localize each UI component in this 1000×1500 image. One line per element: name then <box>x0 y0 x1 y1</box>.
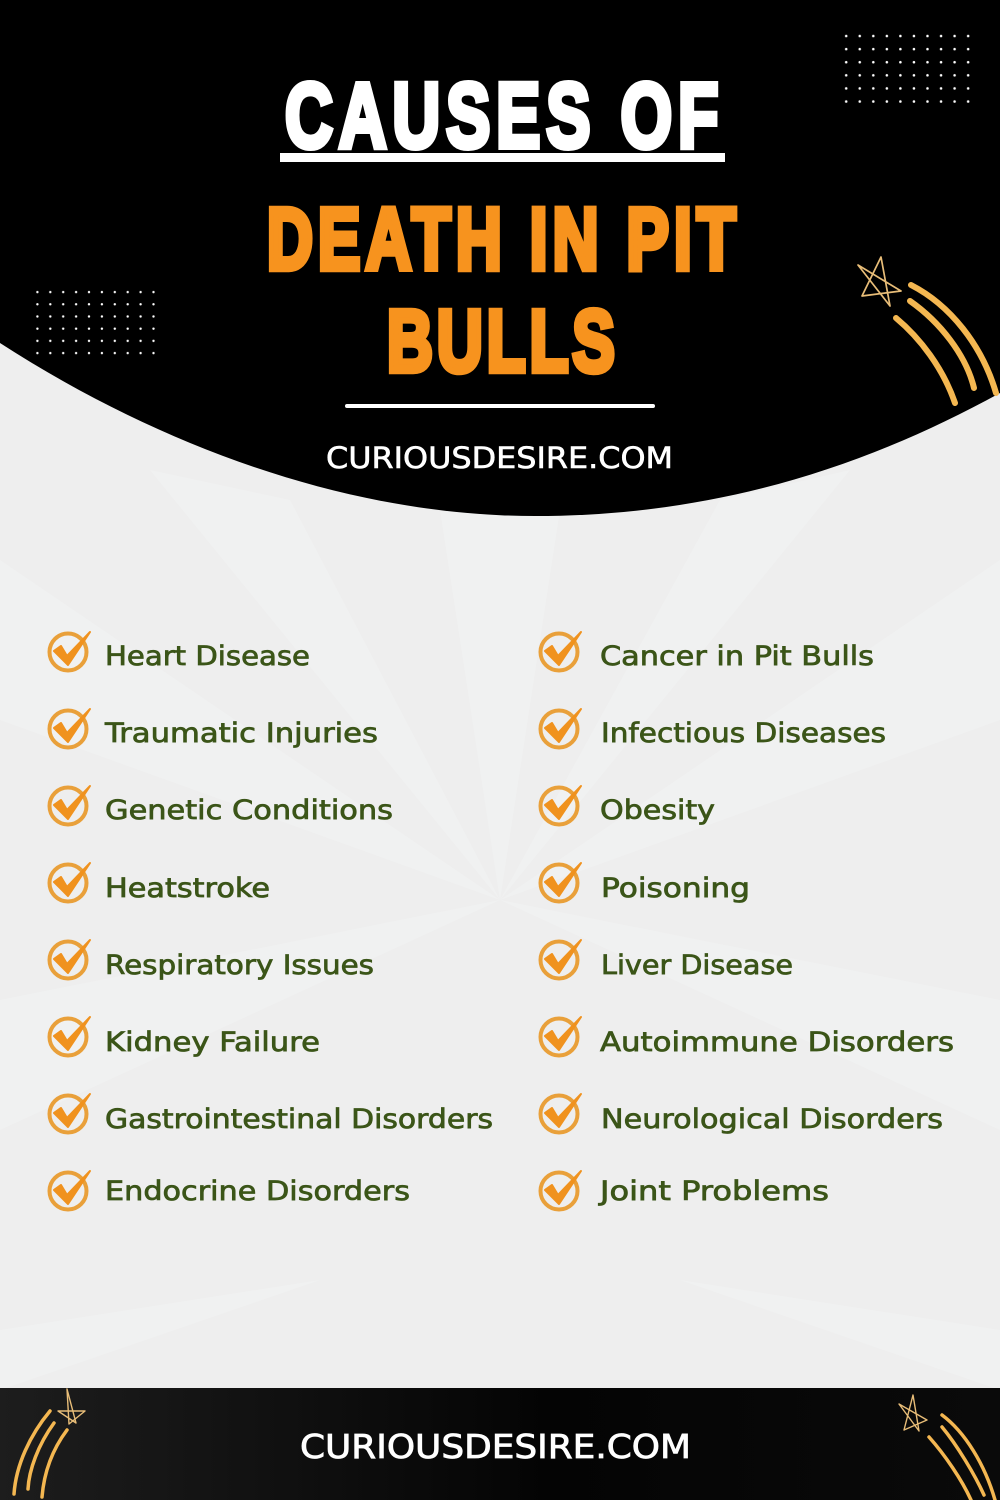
item: joint problems: Joint Problems <box>598 1176 829 1207</box>
icon: shooting star top right <box>858 257 996 403</box>
icon: shooting star footer right <box>899 1395 995 1500</box>
title line: bulls: BULLS <box>387 293 615 390</box>
title line: causes of: CAUSES OF <box>285 63 718 167</box>
item: liver disease <box>540 940 793 981</box>
item: kidney failure <box>50 1017 320 1058</box>
item: gastrointestinal disorders <box>50 1094 493 1135</box>
item: neurological disorders <box>540 1094 943 1135</box>
item: heart disease <box>50 632 310 672</box>
header website text: CURIOUSDESIRE.COM <box>326 441 673 475</box>
title line: death in pit: DEATH IN PIT <box>267 191 736 288</box>
item: heatstroke <box>50 863 270 904</box>
item: cancer in pit bulls <box>540 632 874 672</box>
footer website text: CURIOUSDESIRE.COM <box>300 1427 691 1466</box>
item: traumatic injuries: Traumatic Injuries <box>104 718 378 749</box>
item: autoimmune disorders: Autoimmune Disorders <box>600 1027 954 1058</box>
item: genetic conditions <box>50 786 393 826</box>
item: endocrine disorders <box>50 1171 410 1210</box>
item: respiratory issues <box>50 940 374 981</box>
list: right column <box>540 632 954 1210</box>
item: autoimmune disorders <box>540 1017 954 1058</box>
item: kidney failure: Kidney Failure <box>105 1027 320 1058</box>
item: infectious diseases <box>540 709 886 749</box>
item: infectious diseases: Infectious Diseases <box>601 718 886 749</box>
item: obesity: Obesity <box>600 795 715 826</box>
item: respiratory issues: Respiratory Issues <box>105 950 374 981</box>
item: obesity <box>540 786 715 826</box>
item: poisoning: Poisoning <box>601 873 750 904</box>
item: genetic conditions: Genetic Conditions <box>105 795 393 826</box>
item: traumatic injuries <box>50 709 378 749</box>
footer bar <box>0 1388 1000 1500</box>
header black curved panel <box>0 0 1000 516</box>
dot grid top right <box>840 30 975 108</box>
list: left column <box>50 632 493 1210</box>
item: neurological disorders: Neurological Disorders <box>601 1104 943 1135</box>
item: heatstroke: Heatstroke <box>105 873 270 904</box>
item: gastrointestinal disorders: Gastrointestinal Disorders <box>105 1104 493 1135</box>
item: joint problems <box>540 1171 829 1210</box>
item: endocrine disorders: Endocrine Disorders <box>105 1176 410 1207</box>
item: cancer in pit bulls: Cancer in Pit Bulls <box>600 641 874 672</box>
dot grid left <box>31 286 160 359</box>
item: poisoning <box>540 863 750 904</box>
icon: shooting star footer left <box>14 1389 85 1497</box>
item: heart disease: Heart Disease <box>105 641 310 672</box>
header divider <box>345 404 655 408</box>
item: liver disease: Liver Disease <box>601 950 793 981</box>
